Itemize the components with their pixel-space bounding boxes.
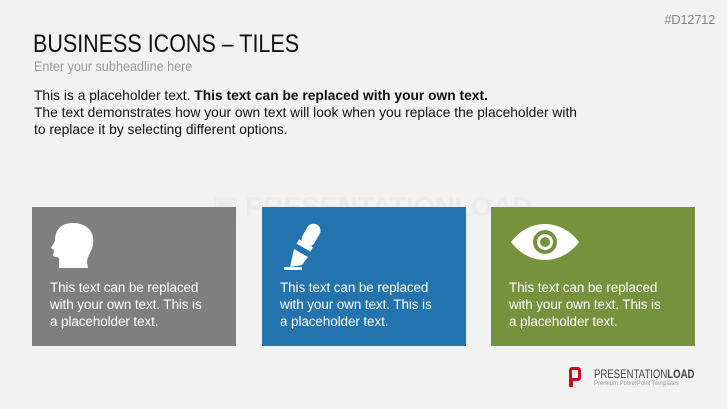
icon: fountain pen xyxy=(284,224,320,270)
watermark: ▣ PRESENTATIONLOAD xyxy=(212,191,532,222)
body text xyxy=(34,88,577,137)
tile: pen xyxy=(262,207,466,346)
code label: #D12712 xyxy=(664,12,715,27)
subheadline: Enter your subheadline here xyxy=(34,58,192,74)
tile: head xyxy=(32,207,236,346)
body text: The text demonstrates how your own text will look when you replace the placeholder with xyxy=(34,105,577,120)
tile text: This text can be replaced with your own text. This is a placeholder text. xyxy=(50,280,202,329)
body text: This is a placeholder text. This text can be replaced with your own text. xyxy=(34,88,488,103)
logo: PRESENTATIONLOAD xyxy=(594,367,694,381)
tile text: This text can be replaced with your own text. This is a placeholder text. xyxy=(509,280,661,329)
icon: head xyxy=(51,223,94,268)
logo xyxy=(569,367,694,387)
tile: eye xyxy=(491,207,695,346)
icon: eye xyxy=(511,224,579,260)
title: BUSINESS ICONS – TILES xyxy=(33,30,299,58)
logo: Premium PowerPoint Templates xyxy=(594,381,679,387)
tile text: This text can be replaced with your own text. This is a placeholder text. xyxy=(280,280,432,329)
body text: to replace it by selecting different options. xyxy=(34,122,288,137)
